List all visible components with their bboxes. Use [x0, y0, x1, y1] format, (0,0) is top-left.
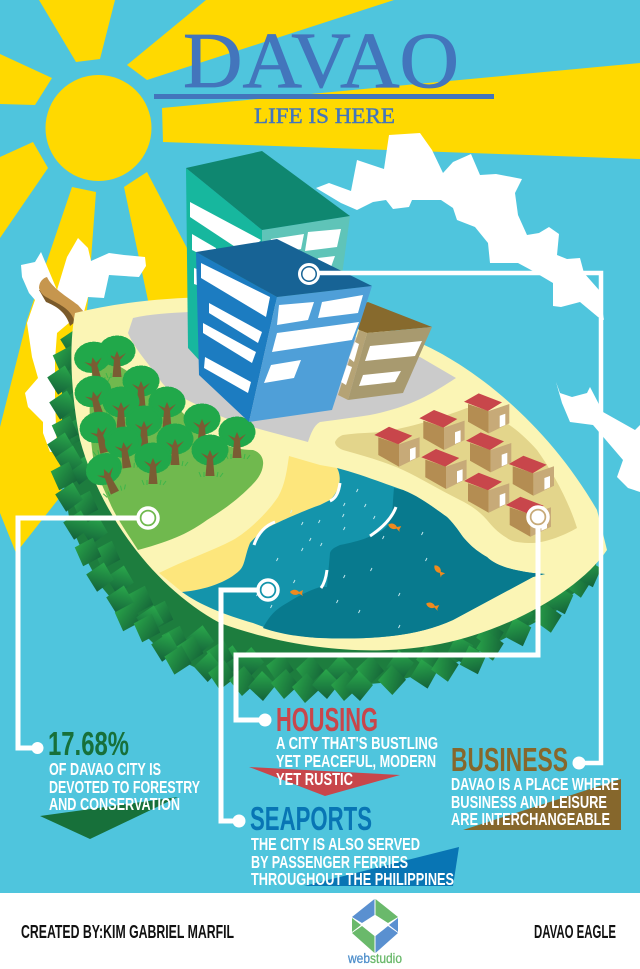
sun rays — [0, 0, 640, 553]
housing land — [335, 408, 577, 543]
icon: sun — [46, 75, 152, 181]
text: forestry: OF DAVAO CITY IS — [49, 759, 161, 779]
text: housing: A CITY THAT'S BUSTLING — [276, 733, 438, 753]
connector: seaports — [221, 580, 278, 828]
text: forestry: AND CONSERVATION — [49, 794, 180, 814]
water ripples — [256, 489, 427, 628]
cloud: large right — [316, 133, 604, 320]
text: forestry — [48, 725, 200, 814]
text: housing: YET RUSTIC — [276, 769, 353, 789]
title underline — [154, 94, 494, 99]
banner: seaports — [304, 847, 459, 886]
pavement — [128, 312, 456, 442]
text: seaports — [250, 800, 454, 889]
water: shallow — [182, 468, 545, 638]
trees — [73, 337, 254, 501]
branch — [39, 277, 84, 326]
banner: forestry — [40, 797, 178, 839]
cloud: lower right — [556, 382, 640, 492]
water: deep — [263, 488, 545, 638]
text: seaports: THROUGHOUT THE PHILIPPINES — [251, 869, 454, 889]
sand beach — [159, 456, 340, 592]
text: seaports: THE CITY IS ALSO SERVED — [251, 834, 420, 854]
fish — [290, 523, 445, 611]
text: housing: HOUSING — [276, 701, 378, 738]
subtitle: LIFE IS HERE — [254, 103, 395, 128]
text: housing: YET PEACEFUL, MODERN — [276, 751, 436, 771]
logo wordmark: webstudio — [347, 951, 402, 966]
banner: business — [463, 779, 621, 830]
text: housing — [276, 701, 438, 789]
connector: forestry — [18, 508, 158, 754]
building: brown — [338, 302, 432, 400]
connector: housing — [236, 507, 548, 726]
text: forestry: DEVOTED TO FORESTRY — [49, 777, 200, 797]
island base — [71, 297, 607, 650]
forest land — [90, 350, 263, 550]
building: blue — [196, 239, 372, 422]
banner: housing — [249, 767, 400, 796]
text: business — [451, 741, 619, 829]
text: business: BUSINESS — [451, 741, 568, 778]
cloud: left — [21, 238, 146, 452]
footer panel — [0, 893, 640, 969]
foliage under island — [44, 324, 605, 703]
houses — [374, 393, 554, 537]
icon: webstudio logo — [352, 899, 398, 953]
text: seaports: SEAPORTS — [250, 800, 372, 837]
building: green — [186, 151, 350, 360]
foam — [254, 483, 396, 588]
text: forestry: 17.68% — [48, 725, 129, 762]
text: seaports: BY PASSENGER FERRIES — [251, 852, 408, 872]
title: DAVAO — [183, 18, 459, 105]
footer credit: CREATED BY:KIM GABRIEL MARFIL — [21, 922, 234, 942]
connector: business — [300, 264, 601, 770]
